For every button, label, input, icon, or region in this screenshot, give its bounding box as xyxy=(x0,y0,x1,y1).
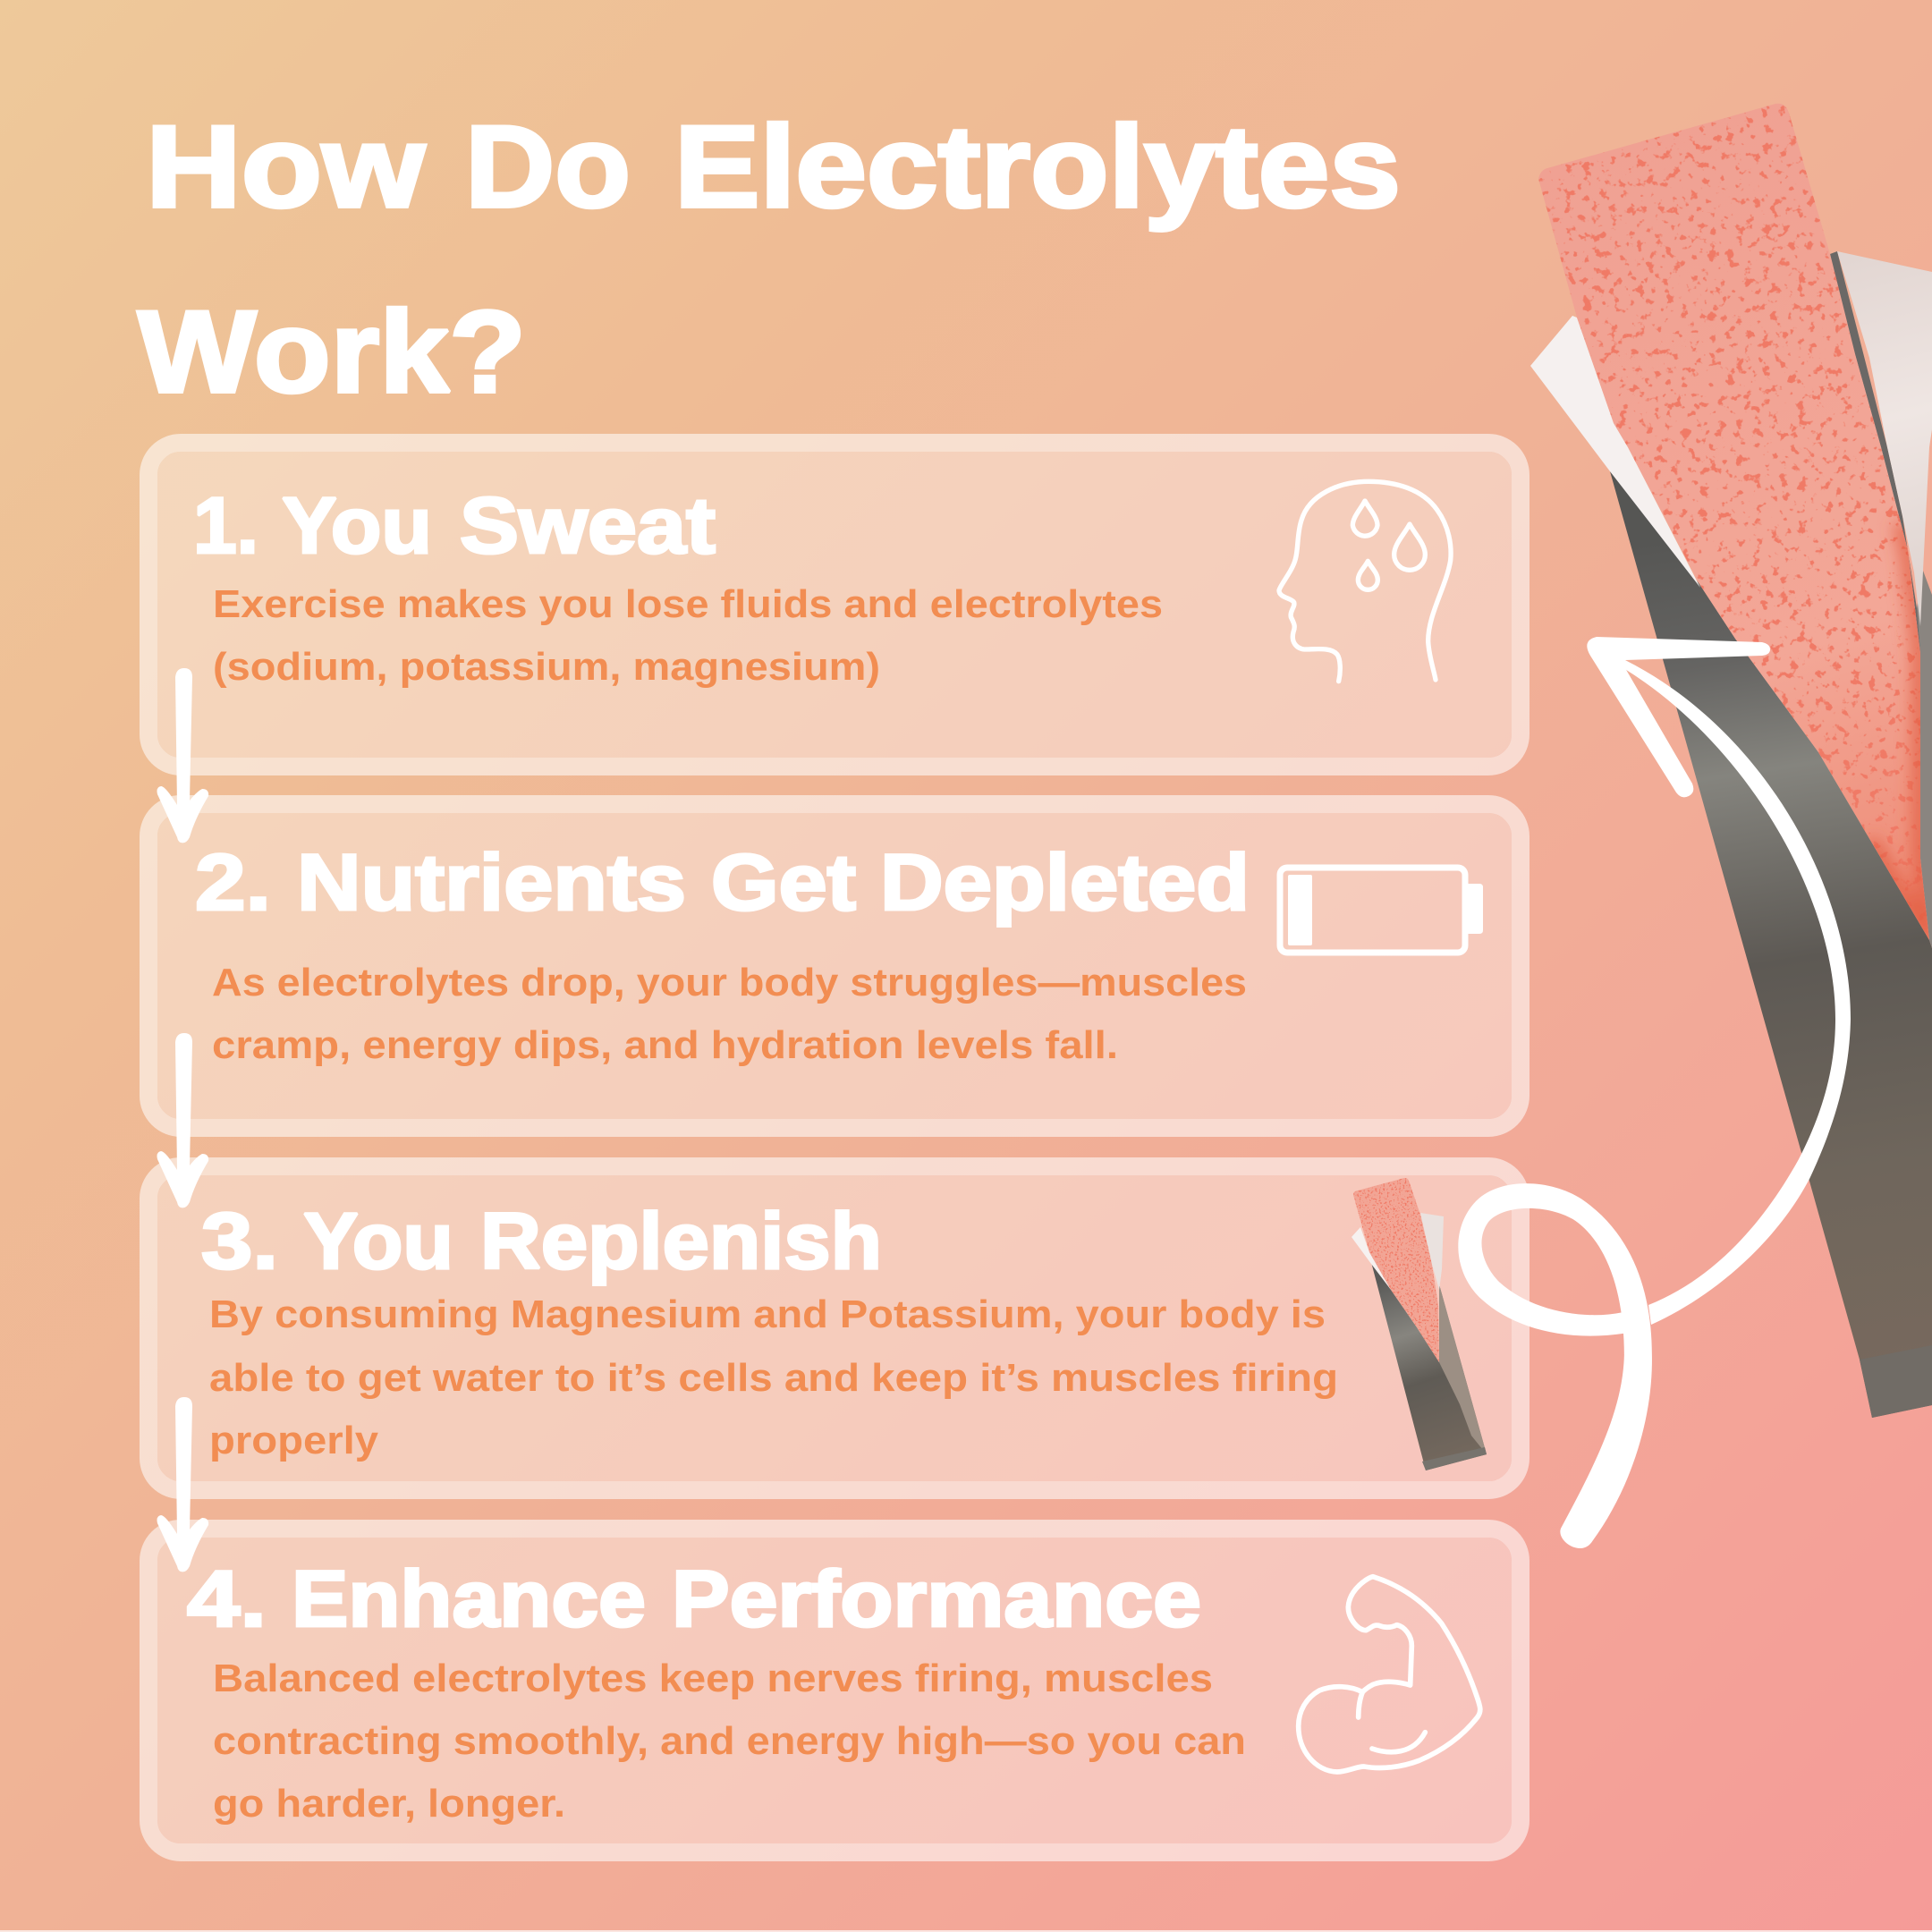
icon: low battery xyxy=(1280,868,1483,953)
arrow: step 3 to step 4 xyxy=(157,1397,208,1572)
arrow: large looping arrow from packet xyxy=(1458,637,1851,1548)
panel 3 border xyxy=(148,1166,1521,1490)
loop and tail xyxy=(1458,1183,1652,1548)
arrow: step 1 to step 2 xyxy=(157,668,208,843)
body text: As electrolytes drop, your body struggles—muscles xyxy=(212,961,1247,1004)
body text xyxy=(213,582,1163,689)
heading: Nutrients Get Depleted: Nutrients xyxy=(297,837,686,927)
title: How xyxy=(146,101,426,232)
heading: Enhance Performance: Enhance xyxy=(292,1554,646,1643)
panel 2 fill xyxy=(157,813,1512,1119)
small speckle texture xyxy=(1353,1178,1439,1360)
body text: Exercise makes you lose fluids and electrolytes xyxy=(213,582,1163,626)
body text: able to get water to it’s cells and keep it’s muscles firing xyxy=(209,1356,1338,1400)
pink powder strip xyxy=(1538,104,1929,940)
product image: small stick pack xyxy=(1346,1172,1487,1470)
heading: Enhance Performance: 4. xyxy=(187,1554,267,1643)
arrowhead xyxy=(1587,637,1770,797)
product image: large electrolyte stick pack xyxy=(1530,98,1932,1418)
body text: contracting smoothly, and energy high—so you can xyxy=(213,1719,1246,1763)
heading: Enhance Performance: Performance xyxy=(672,1554,1201,1643)
body text xyxy=(212,961,1247,1067)
body text: (sodium, potassium, magnesium) xyxy=(213,645,880,689)
heading: Nutrients Get Depleted: 2. xyxy=(195,837,271,927)
foil packet body xyxy=(1610,471,1932,1418)
title xyxy=(138,101,1401,417)
arrow: step 2 to step 3 xyxy=(157,1033,208,1208)
heading: You Replenish: 3. xyxy=(201,1196,278,1285)
body text: By consuming Magnesium and Potassium, your body is xyxy=(209,1292,1326,1336)
right foil strip xyxy=(1917,571,1932,948)
panel: step 4 xyxy=(148,1529,1521,1852)
heading: You Sweat xyxy=(193,480,716,570)
heading: Enhance Performance xyxy=(187,1554,1201,1643)
icon: head with sweat drops xyxy=(1279,481,1451,682)
heading: Nutrients Get Depleted: Get xyxy=(711,837,856,927)
long curve to arrowhead xyxy=(1623,660,1851,1325)
body text xyxy=(209,1292,1338,1462)
heading: Nutrients Get Depleted: Depleted xyxy=(880,837,1250,927)
body text: properly xyxy=(209,1419,379,1462)
panel 1 border xyxy=(148,443,1521,767)
heading: You Sweat: 1. xyxy=(193,480,258,570)
panel 3 fill xyxy=(157,1175,1512,1481)
small right flap xyxy=(1420,1213,1444,1290)
title: Do xyxy=(465,101,631,232)
heading: You Replenish: Replenish xyxy=(480,1196,882,1285)
body text xyxy=(213,1657,1246,1826)
foil bottom seal xyxy=(1860,1345,1932,1418)
heading: You Sweat: You xyxy=(282,480,432,570)
small foil right flap xyxy=(1439,1284,1487,1454)
body text: Balanced electrolytes keep nerves firing, muscles xyxy=(213,1657,1213,1700)
panel: step 1 xyxy=(148,443,1521,767)
panel: step 2 xyxy=(148,804,1521,1128)
icon: flexed bicep xyxy=(1299,1577,1480,1772)
inner wrapper shadow xyxy=(1830,251,1920,653)
small foil body xyxy=(1371,1262,1487,1470)
small foil seal xyxy=(1422,1447,1487,1470)
panel 4 border xyxy=(148,1529,1521,1852)
panel 2 border xyxy=(148,804,1521,1128)
heading: Nutrients Get Depleted xyxy=(195,837,1250,927)
left white flap xyxy=(1530,316,1700,588)
heading: You Replenish xyxy=(201,1196,882,1285)
right white flap xyxy=(1837,251,1932,626)
heading: You Replenish: You xyxy=(303,1196,453,1285)
panel 4 fill xyxy=(157,1538,1512,1843)
body text: cramp, energy dips, and hydration levels fall. xyxy=(212,1023,1118,1067)
title: Electrolytes xyxy=(674,101,1401,232)
heading: You Sweat: Sweat xyxy=(460,480,716,570)
panel 1 fill xyxy=(157,452,1512,758)
title: Work? xyxy=(138,286,526,417)
small left flap xyxy=(1352,1227,1391,1290)
panel: step 3 xyxy=(148,1166,1521,1490)
small pink strip xyxy=(1353,1178,1439,1362)
pink speckle texture xyxy=(1530,98,1932,948)
body text: go harder, longer. xyxy=(213,1782,565,1826)
